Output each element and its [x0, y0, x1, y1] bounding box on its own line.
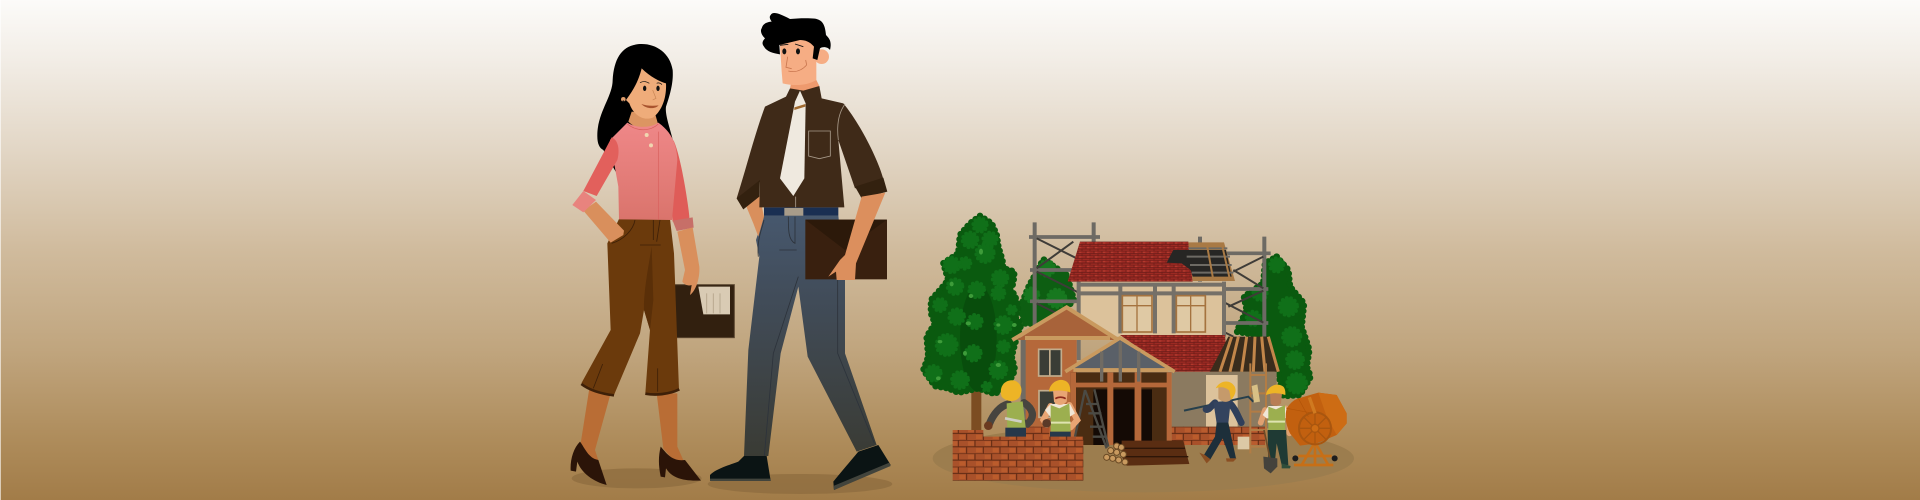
- folder: [805, 220, 887, 279]
- woman far sleeve: [670, 140, 689, 222]
- paint bucket: [1238, 437, 1249, 449]
- trouser hems and seams: [581, 220, 679, 395]
- porch posts: [1071, 372, 1172, 445]
- woman hair: [597, 44, 673, 173]
- woman legs: [581, 388, 684, 464]
- woman earring and ear: [621, 97, 626, 102]
- man ground shadow: [708, 474, 892, 494]
- right ladder: [1250, 363, 1266, 453]
- upper left window: [1122, 296, 1152, 332]
- folder flap: [805, 220, 887, 250]
- man shoes: [710, 445, 891, 490]
- trouser seams: [758, 217, 874, 456]
- left tree trunk: [971, 388, 981, 432]
- porch ladder: [1075, 389, 1108, 448]
- left tree canopy: [923, 216, 1021, 394]
- tree base foliage: [923, 216, 1021, 394]
- woman ground shadow: [572, 468, 702, 488]
- left edge strip: [0, 0, 1, 500]
- woman near arm: [583, 202, 624, 243]
- worker with shovel: [1261, 385, 1291, 468]
- worker laying bricks: [984, 380, 1032, 437]
- man trousers: [744, 216, 877, 456]
- woman shoes: [571, 442, 701, 485]
- belt: [764, 207, 838, 216]
- woman trousers: [581, 219, 679, 395]
- exposed roof section: [1167, 242, 1235, 281]
- construction scene: [923, 216, 1354, 492]
- worker with red scarf: [1042, 380, 1077, 437]
- man ear: [814, 49, 829, 64]
- upper storey wall: [1078, 282, 1225, 337]
- man right arm and hand: [828, 193, 885, 280]
- left wing lower window: [1039, 391, 1056, 417]
- brick wall: [953, 430, 1083, 481]
- tree shaded centre: [960, 285, 997, 392]
- brick stack behind wall: [1026, 427, 1049, 437]
- open rafters: [1210, 337, 1280, 372]
- shirt cuffs: [737, 178, 887, 209]
- porch gable: [1065, 338, 1175, 382]
- ground ellipse: [933, 424, 1354, 492]
- tie clip: [794, 104, 805, 110]
- man left hand in pocket: [745, 195, 764, 237]
- man neck: [790, 80, 819, 91]
- tie: [780, 91, 806, 196]
- woman right arm and hand: [677, 227, 699, 295]
- woman neck: [628, 112, 658, 129]
- man shirt: [737, 86, 883, 209]
- foundation bricks: [1172, 427, 1267, 445]
- left wing upper window: [1039, 349, 1061, 376]
- upper storey timber frame: [1078, 282, 1225, 360]
- porch interior: [1071, 372, 1171, 445]
- belt buckle: [784, 208, 803, 216]
- woman left sleeve: [583, 137, 619, 196]
- blouse placket and buttons: [627, 124, 658, 219]
- porch door openings: [1093, 389, 1152, 445]
- walking worker with roller: [1184, 381, 1260, 463]
- woman facial features: [640, 82, 662, 108]
- tree leaf clusters: [926, 218, 1016, 391]
- tree highlights: [936, 249, 1017, 380]
- back tree right: [1237, 257, 1311, 396]
- shoe soles: [710, 463, 891, 490]
- woman blouse: [610, 123, 677, 220]
- left wing post: [1021, 340, 1026, 420]
- beige window wall: [1206, 375, 1238, 427]
- upper right window: [1176, 296, 1205, 332]
- back tree middle: [1021, 259, 1074, 324]
- man hair: [761, 13, 831, 60]
- shirt pocket and seam: [796, 104, 845, 207]
- scaffolding: [1029, 222, 1271, 337]
- lower right wall: [1172, 372, 1277, 428]
- left wing wall: [1025, 340, 1077, 445]
- woman face: [626, 68, 666, 119]
- log pile: [1104, 441, 1189, 466]
- woman bag: [674, 285, 734, 338]
- upper roof tiles: [1068, 242, 1193, 282]
- woman crease shade: [644, 247, 653, 330]
- left wing gable: [1012, 307, 1118, 340]
- cement mixer: [1286, 393, 1347, 465]
- woman figure: [571, 44, 734, 488]
- man face: [779, 35, 816, 85]
- left cuff: [572, 191, 596, 212]
- shovel: [1263, 430, 1277, 473]
- man figure: [708, 13, 892, 494]
- lower roof tiles: [1120, 335, 1228, 372]
- man facial features: [780, 44, 807, 72]
- right cuff: [673, 217, 694, 231]
